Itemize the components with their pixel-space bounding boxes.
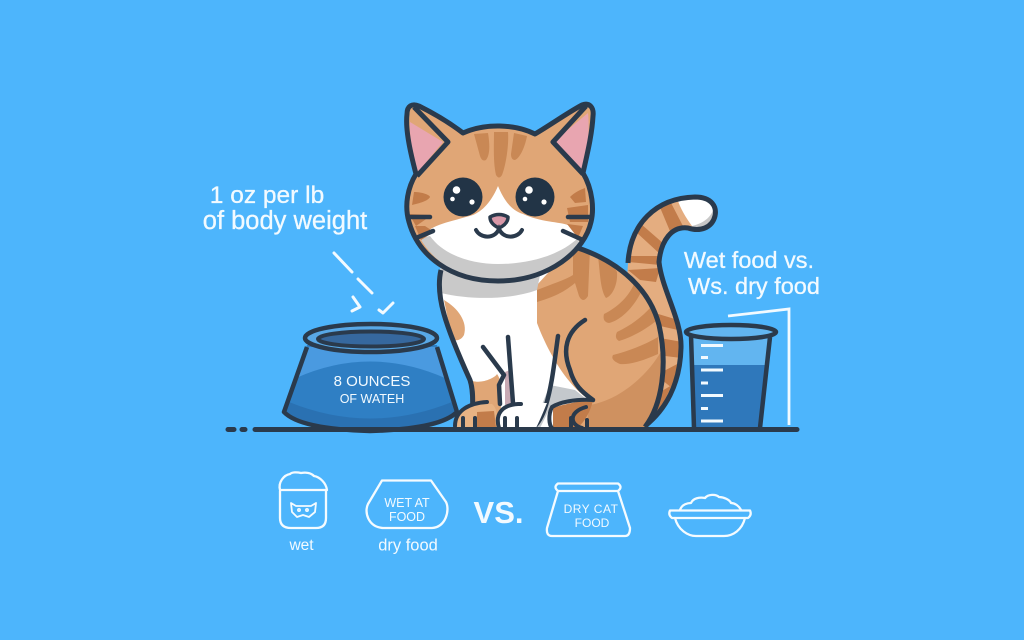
heading: water rule: of body weight xyxy=(203,207,367,235)
icon: food dish xyxy=(669,495,751,536)
label: wet vs dry xyxy=(684,247,820,299)
bowl label: OF WATEH xyxy=(340,392,404,406)
icon: wet food bag: WET AT xyxy=(384,496,430,510)
cat collar band xyxy=(440,268,540,298)
cat legs xyxy=(483,320,593,428)
cat whiskers xyxy=(409,217,590,240)
ground line xyxy=(228,427,797,432)
cat ears inner xyxy=(410,113,589,172)
cat xyxy=(407,104,720,430)
arrow: dashes to bowl xyxy=(334,253,393,313)
vs text: VS. xyxy=(474,495,523,530)
cat head outline xyxy=(407,104,593,281)
cup tick marks xyxy=(701,346,723,421)
heading: water rule xyxy=(203,182,367,235)
cat tail xyxy=(620,197,720,426)
icon: dry cat food bag: DRY CAT xyxy=(564,502,619,516)
cat nose and mouth xyxy=(476,214,522,237)
measuring cup xyxy=(686,325,776,428)
label: wet vs dry: Wet food vs. xyxy=(684,247,814,273)
icon: wet food can xyxy=(280,472,327,528)
cat body stripes xyxy=(537,248,590,302)
label: wet: wet xyxy=(288,537,314,554)
icon: dry cat food bag: FOOD xyxy=(575,516,610,530)
heading: water rule: 1 oz per lb xyxy=(210,182,324,209)
label: wet vs dry: Ws. dry food xyxy=(688,273,820,299)
cat forehead stripes xyxy=(474,132,527,178)
cat eyes xyxy=(444,178,554,216)
cat paws xyxy=(455,400,593,428)
bowl label xyxy=(334,373,410,406)
cat body xyxy=(436,246,666,427)
infographic scene xyxy=(204,102,819,554)
icon: wet food bag: FOOD xyxy=(389,510,425,524)
label: dry food: dry food xyxy=(378,536,438,554)
icon: dry cat food bag xyxy=(547,484,630,536)
bowl label: 8 OUNCES xyxy=(334,373,410,390)
cat head xyxy=(407,104,593,281)
icon: wet food bag xyxy=(367,480,447,528)
cat face white and gray xyxy=(421,186,579,281)
water bowl xyxy=(284,324,457,431)
bracket line xyxy=(728,309,789,425)
